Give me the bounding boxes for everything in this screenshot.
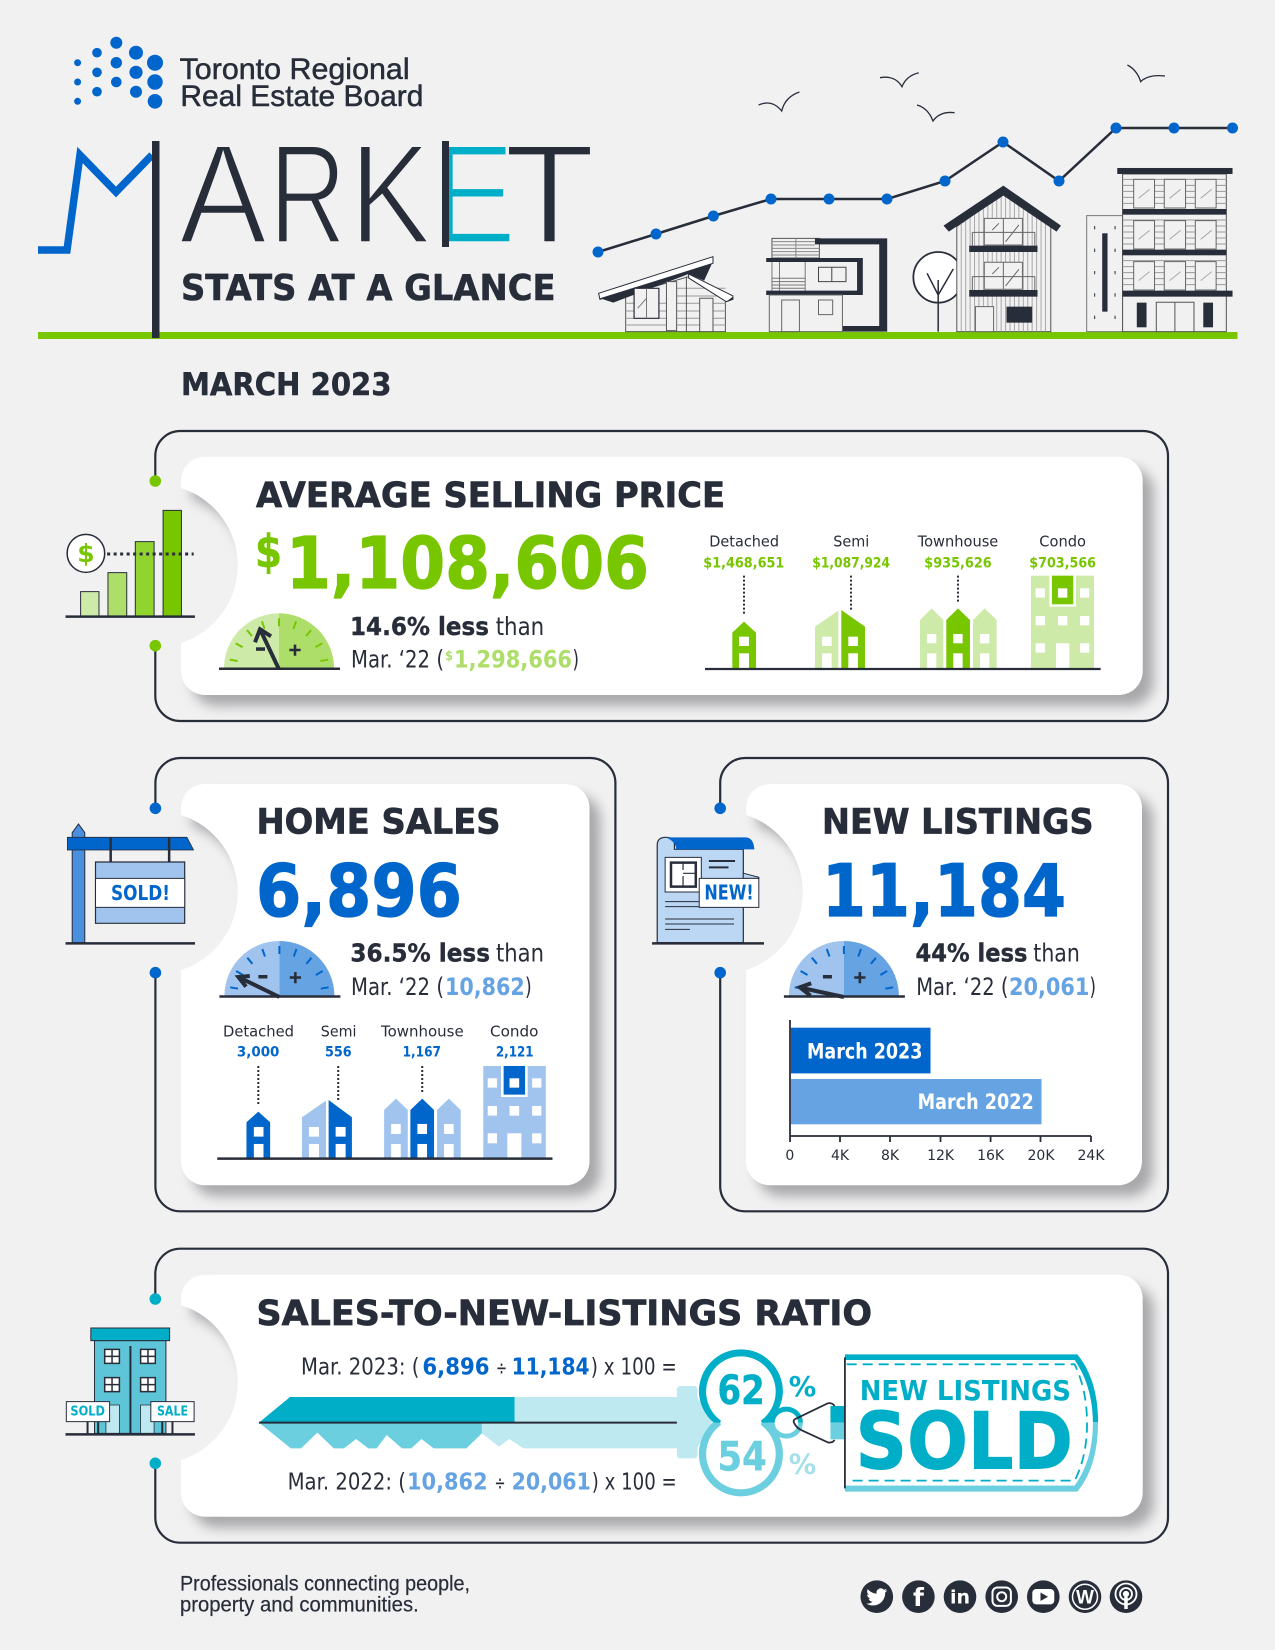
formula March 2022: Mar. 2022: ( <box>288 1469 406 1495</box>
home type labels and values: Condo <box>1039 534 1086 551</box>
icon: rising bars with dollar sign <box>66 510 195 617</box>
icon: new listing document: NEW! <box>704 880 754 904</box>
letters ARK: R <box>269 114 346 273</box>
formula March 2023: 11,184 <box>512 1352 590 1380</box>
letters ARK <box>179 114 431 274</box>
gauge: + <box>288 968 303 988</box>
icon: youtube <box>1027 1580 1060 1613</box>
bar: March 2022 <box>791 1079 1042 1124</box>
comparison text <box>350 612 579 674</box>
key head with ratio values <box>677 1349 816 1496</box>
home type labels and values: 556 <box>325 1045 352 1061</box>
logo: Toronto Regional Real Estate Board <box>74 37 423 113</box>
icon: wordpress: W <box>1076 1588 1094 1608</box>
formula March 2022: 10,862 <box>407 1467 488 1495</box>
connector dot bottom <box>714 967 726 978</box>
key head with ratio values: 62 <box>718 1368 765 1414</box>
home type labels and values: Condo <box>490 1024 538 1041</box>
icon: rising bars with dollar sign: $ <box>77 539 95 568</box>
big value: 11,184 <box>822 850 1066 934</box>
letter T: T <box>504 114 595 273</box>
gauge <box>784 941 905 997</box>
panel: sales-to-new-listings ratio <box>66 1249 1168 1543</box>
formula March 2023: ) x 100 = <box>591 1354 677 1380</box>
home type labels and values: 1,167 <box>403 1045 441 1061</box>
home type labels and values: Detached <box>223 1024 294 1041</box>
letters ARK: A <box>179 116 268 274</box>
white card <box>746 784 1142 1185</box>
connector dot top <box>150 475 161 487</box>
social media icons <box>860 1580 1142 1613</box>
footer tagline: Professionals connecting people, <box>180 1573 470 1596</box>
comparison text: than <box>496 939 544 968</box>
axis labels: 20K <box>1028 1148 1055 1164</box>
heading: HOME SALES <box>256 802 500 842</box>
formula March 2023: ÷ <box>496 1355 507 1379</box>
comparison text: ) <box>525 973 532 1001</box>
bar chart <box>785 1020 1105 1164</box>
bar: March 2023: March 2023 <box>807 1039 922 1063</box>
home type labels and values: Detached <box>709 534 779 551</box>
sold tag: SOLD <box>856 1397 1073 1487</box>
house 3 <box>944 186 1061 332</box>
home type labels and values <box>703 534 1096 572</box>
home type labels and values: 2,121 <box>496 1045 534 1061</box>
line chart over houses <box>592 122 1238 258</box>
home type labels and values: Semi <box>321 1024 356 1041</box>
panel outline <box>155 431 1168 721</box>
icon: wordpress <box>1069 1580 1101 1613</box>
axis labels: 12K <box>927 1148 955 1164</box>
footer tagline <box>180 1573 470 1617</box>
home type labels and values: Townhouse <box>380 1024 464 1041</box>
home type labels and values: 3,000 <box>237 1045 279 1061</box>
icon: facebook <box>902 1580 935 1613</box>
icon: building with sold and sale signs: SALE <box>157 1405 188 1420</box>
comparison text: $ <box>445 649 453 664</box>
card shadow <box>192 1286 1154 1528</box>
home type labels and values: Townhouse <box>917 534 998 551</box>
home type labels and values: $1,468,651 <box>703 556 784 572</box>
connector dot top <box>714 802 726 814</box>
letter E dark stem <box>442 141 449 247</box>
formula March 2023: 6,896 <box>422 1352 490 1380</box>
white card <box>181 1275 1143 1517</box>
comparison text: than <box>1033 939 1080 968</box>
houses illustration <box>599 168 1233 332</box>
birds <box>759 65 1165 121</box>
sold tag <box>794 1354 1098 1492</box>
icon: new listing document <box>652 837 764 943</box>
title vertical bar <box>152 141 160 338</box>
icon: twitter <box>860 1580 893 1613</box>
comparison text: than <box>496 612 544 641</box>
big value: 6,896 <box>256 850 462 934</box>
key blade <box>259 1397 687 1448</box>
axis labels: 4K <box>831 1148 850 1164</box>
connector dot bottom <box>150 640 161 652</box>
formula March 2022: ÷ <box>494 1470 506 1494</box>
subtitle: STATS AT A GLANCE <box>181 268 556 309</box>
comparison text: 1,298,666 <box>454 646 572 674</box>
icon: building with sold and sale signs: SOLD <box>70 1405 105 1420</box>
formula March 2022: ) x 100 = <box>592 1469 677 1495</box>
panel: new listings <box>652 758 1168 1211</box>
title: MARKET <box>38 141 590 254</box>
panel outline <box>155 758 615 1211</box>
card shadow <box>757 795 1153 1196</box>
comparison text: ) <box>572 646 579 674</box>
comparison text: 10,862 <box>445 973 525 1001</box>
building 4 <box>1087 168 1233 332</box>
connector dot top <box>150 1293 161 1305</box>
icon: logo dots <box>74 37 163 109</box>
big value: $ <box>255 525 282 578</box>
comparison text <box>350 939 544 1001</box>
icon: podcast <box>1110 1580 1142 1613</box>
comparison text: Mar. ‘22 ( <box>916 973 1008 1001</box>
icon: sold sign <box>66 824 195 943</box>
home type labels and values: $1,087,924 <box>812 556 890 572</box>
axis labels: 24K <box>1078 1148 1105 1164</box>
icon: linkedin <box>944 1580 976 1613</box>
house 2 <box>766 238 887 332</box>
home type labels and values <box>223 1024 538 1061</box>
heading: AVERAGE SELLING PRICE <box>256 476 725 516</box>
gauge <box>219 613 340 669</box>
comparison text <box>916 939 1096 1001</box>
blue M line <box>38 155 152 250</box>
bar: March 2022: March 2022 <box>918 1090 1034 1114</box>
panel: home sales <box>66 758 615 1211</box>
logo text line 2: Real Estate Board <box>180 80 423 113</box>
icon: instagram <box>985 1580 1018 1613</box>
connector dot top <box>150 802 161 814</box>
letters ARK: K <box>350 115 431 274</box>
white card <box>181 784 590 1185</box>
house 1 <box>599 257 733 332</box>
formula March 2023: Mar. 2023: ( <box>301 1354 419 1380</box>
axis labels <box>785 1148 1105 1164</box>
panel outline <box>720 758 1168 1211</box>
formula March 2023 <box>301 1352 677 1380</box>
icon: building with sold and sale signs <box>66 1328 195 1434</box>
big value: 1,108,606 <box>286 522 649 605</box>
comparison text: Mar. ‘22 ( <box>351 646 444 674</box>
gauge: + <box>288 640 302 660</box>
tree <box>913 252 963 332</box>
axis labels: 16K <box>977 1148 1005 1164</box>
sold tag: NEW LISTINGS <box>860 1374 1071 1407</box>
comparison text: 14.6% less <box>350 612 489 641</box>
heading: NEW LISTINGS <box>822 802 1094 842</box>
icon: facebook: f <box>913 1583 925 1612</box>
comparison text: 20,061 <box>1009 973 1089 1001</box>
letter E teal: E <box>432 115 516 274</box>
key head with ratio values: % <box>789 1447 816 1480</box>
gauge <box>219 941 340 997</box>
axis labels: 0 <box>785 1148 794 1164</box>
comparison text: 44% less <box>916 939 1028 968</box>
comparison text: ) <box>1090 973 1096 1001</box>
axis labels: 8K <box>881 1148 900 1164</box>
icon: sold sign: SOLD! <box>111 881 170 905</box>
card shadow <box>192 795 600 1196</box>
heading: SALES-TO-NEW-LISTINGS RATIO <box>256 1294 872 1334</box>
icon: linkedin: in <box>950 1586 970 1608</box>
date heading: MARCH 2023 <box>181 367 392 403</box>
home type icons <box>705 576 1101 669</box>
card shadow <box>192 468 1154 706</box>
ground line <box>38 332 1238 339</box>
key head with ratio values: 54 <box>718 1435 767 1481</box>
bar: March 2023 <box>791 1028 930 1073</box>
logo text line 1: Toronto Regional <box>180 53 410 86</box>
footer tagline: property and communities. <box>180 1594 419 1617</box>
home type labels and values: Semi <box>833 534 869 551</box>
comparison text: 36.5% less <box>350 939 490 968</box>
key head with ratio values: % <box>789 1370 816 1403</box>
panel outline <box>155 1249 1168 1543</box>
connector dot bottom <box>150 1458 161 1469</box>
axes <box>790 1020 1091 1142</box>
panel: average selling price <box>66 431 1168 721</box>
home type labels and values: $703,566 <box>1029 556 1096 572</box>
formula March 2022 <box>288 1467 677 1495</box>
home type icons <box>217 1066 552 1159</box>
gauge: + <box>853 968 867 988</box>
connector dot bottom <box>150 967 161 978</box>
white card <box>181 457 1143 695</box>
comparison text: Mar. ‘22 ( <box>351 973 444 1001</box>
home type labels and values: $935,626 <box>924 556 992 572</box>
formula March 2022: 20,061 <box>512 1467 591 1495</box>
